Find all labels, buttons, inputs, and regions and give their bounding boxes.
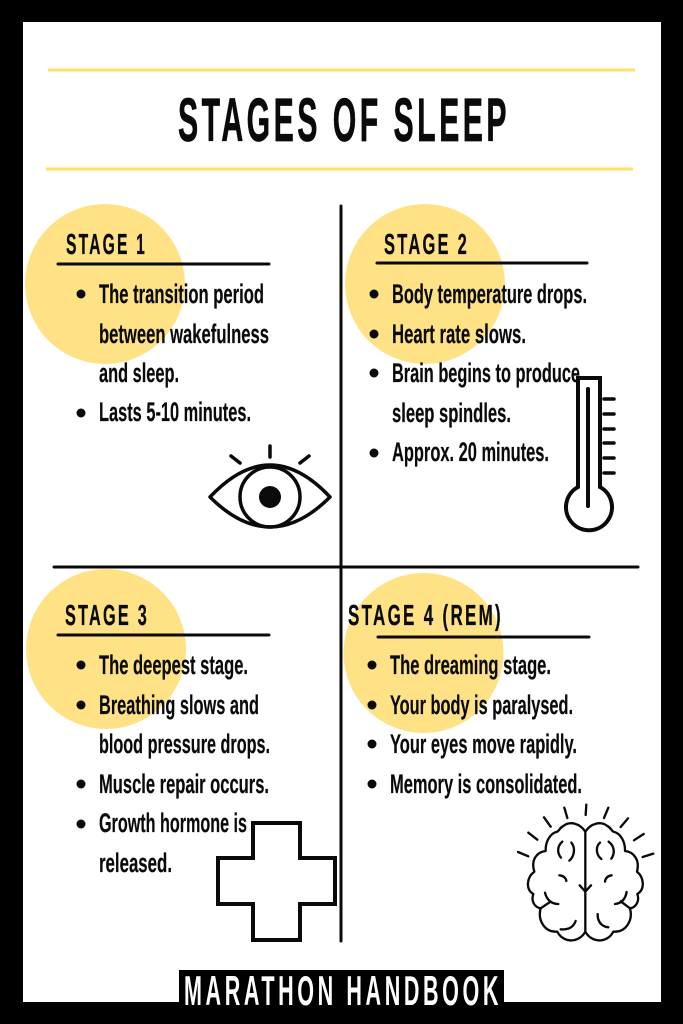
panel: stage 1 [25, 204, 330, 527]
bullets 2: Approx. 20 minutes. [392, 437, 549, 467]
footer banner [179, 967, 504, 1014]
bullets 3: Growth hormone is [99, 808, 247, 838]
bullets 4 [368, 650, 582, 799]
bullets 3 [76, 650, 270, 878]
heading: stage 2: STAGE 2 [384, 229, 469, 261]
bullets 3: released. [99, 848, 172, 878]
yellow circle 3 [26, 569, 186, 729]
quadrant dividers [54, 206, 638, 941]
panel: stage 2 [345, 204, 614, 530]
bullets 1: between wakefulness [99, 319, 269, 349]
yellow circle 1 [25, 204, 185, 364]
underline 3 [58, 634, 269, 636]
bullets 3: Breathing slows and [99, 690, 259, 720]
underline 4 [378, 636, 589, 638]
panel: stage 3 [26, 569, 335, 940]
icon: medical cross [218, 823, 335, 940]
bullets 4: The dreaming stage. [390, 650, 551, 680]
bullets 2 [370, 279, 587, 467]
heading: stage 4: STAGE 4 (REM) [348, 600, 503, 632]
bullets 3: The deepest stage. [99, 650, 248, 680]
icon: brain [518, 805, 653, 940]
bullets 1: Lasts 5-10 minutes. [99, 397, 251, 427]
heading: stage 3: STAGE 3 [65, 600, 149, 632]
yellow circle 2 [345, 204, 505, 364]
yellow circle 4 [344, 573, 504, 733]
heading: stage 1: STAGE 1 [66, 229, 147, 261]
bullets 1 [76, 279, 269, 427]
bullets 2: sleep spindles. [392, 398, 511, 428]
bullets 3: Muscle repair occurs. [99, 769, 269, 799]
bullets 2: Heart rate slows. [392, 319, 526, 349]
title rules [46, 70, 635, 169]
underline 2 [377, 262, 587, 264]
bullets 1: The transition period [99, 279, 264, 309]
bullets 1: and sleep. [99, 358, 179, 388]
icon: thermometer [566, 378, 614, 530]
underline 1 [58, 262, 269, 266]
panel: stage 4 [344, 573, 653, 940]
icon: eye [210, 446, 330, 527]
bullets 3: blood pressure drops. [99, 729, 270, 759]
